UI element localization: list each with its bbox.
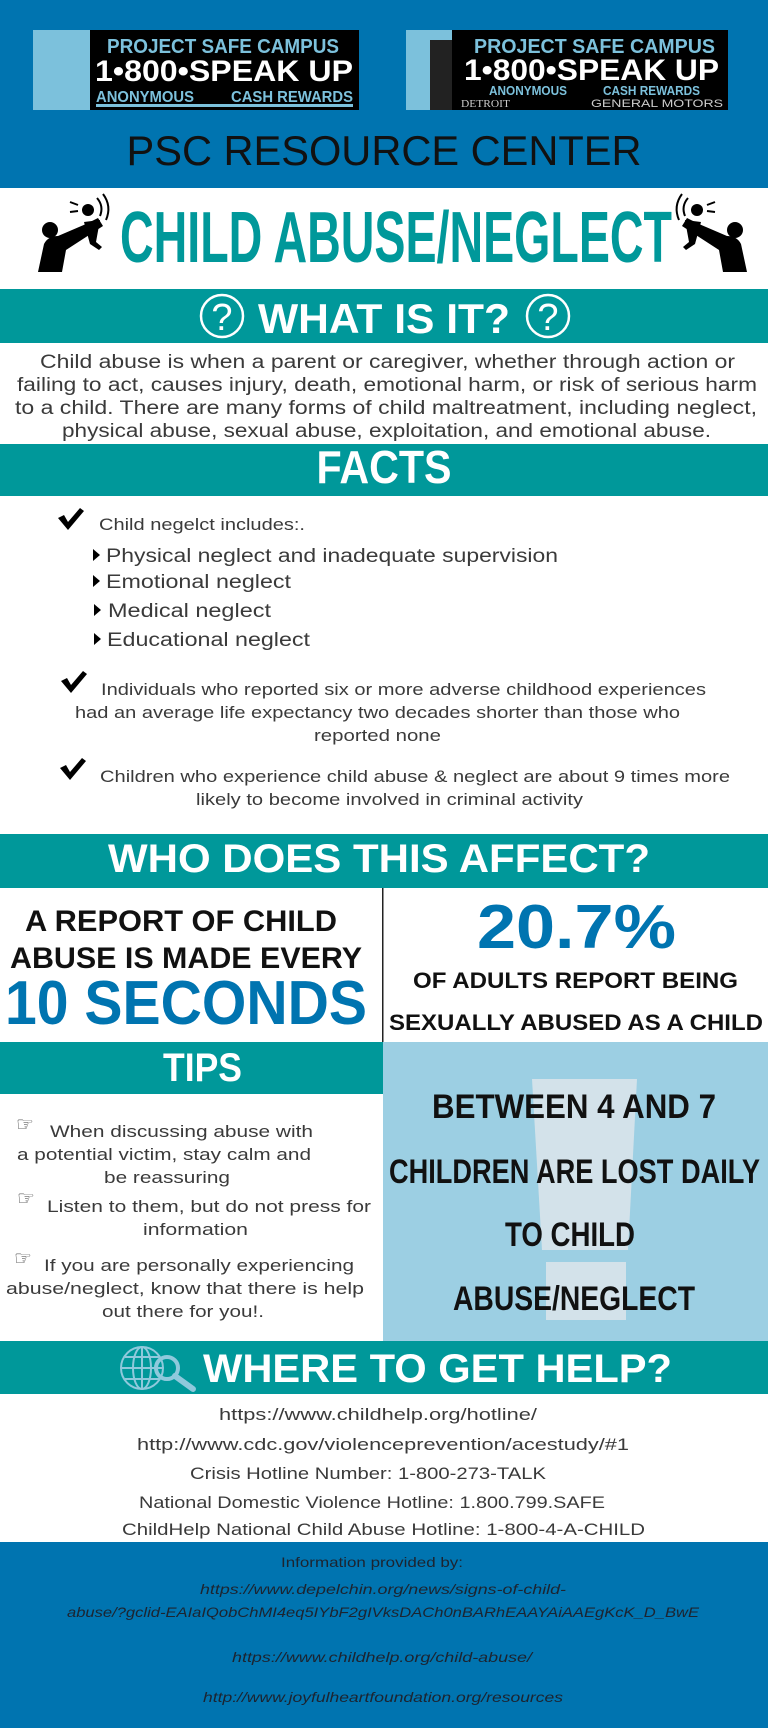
icon: adult hitting child right xyxy=(677,194,747,272)
footer: sources xyxy=(0,1542,768,1728)
panel: children lost daily: ABUSE/NEGLECT xyxy=(453,1280,695,1318)
stat: 20.7% xyxy=(389,893,763,1035)
logo right xyxy=(406,30,728,110)
help resources list: http://www.cdc.gov/violenceprevention/acestudy/#1 xyxy=(137,1435,629,1454)
text block: definition: physical abuse, sexual abuse, exploitation, and emotional abuse. xyxy=(62,421,711,442)
fact 2: had an average life expectancy two decades shorter than those who xyxy=(75,703,680,722)
logo right: CASH REWARDS xyxy=(603,83,700,98)
logo right: PROJECT SAFE CAMPUS xyxy=(474,36,715,58)
panel: children lost daily xyxy=(383,1042,768,1341)
help resources list: ChildHelp National Child Abuse Hotline: 1-800-4-A-CHILD xyxy=(122,1520,645,1539)
heading: facts xyxy=(0,441,768,496)
footer: sources: https://www.childhelp.org/child-abuse/ xyxy=(232,1649,535,1665)
help resources list: Crisis Hotline Number: 1-800-273-TALK xyxy=(190,1464,547,1483)
fact 3: Children who experience child abuse & neglect are about 9 times more xyxy=(100,767,730,786)
logo left: 1•800•SPEAK UP xyxy=(95,55,353,88)
heading: what is it xyxy=(0,289,768,343)
fact 2: reported none xyxy=(314,726,441,745)
help resources list xyxy=(122,1405,645,1539)
panel: tips: TIPS xyxy=(163,1046,242,1090)
logo right: GENERAL MOTORS xyxy=(591,98,723,110)
footer: sources: http://www.joyfulheartfoundation.org/resources xyxy=(203,1689,563,1705)
panel: children lost daily: BETWEEN 4 AND 7 xyxy=(432,1088,716,1126)
footer: sources: abuse/?gclid-EAIaIQobChMI4eq5IYbF2gIVksDACh0nBARhEAAYAiAAEgKcK_D_BwE xyxy=(67,1604,700,1620)
fact 2: Individuals who reported six or more adverse childhood experiences xyxy=(101,680,706,699)
header band xyxy=(0,0,768,188)
help resources list: National Domestic Violence Hotline: 1.800.799.SAFE xyxy=(139,1493,605,1512)
text block: definition: to a child. There are many forms of child maltreatment, including neglect, xyxy=(15,398,757,419)
heading: what is it: ? xyxy=(537,297,559,339)
panel: tips: ☞ xyxy=(16,1114,34,1136)
text block: definition: Child abuse is when a parent or caregiver, whether through action or xyxy=(40,352,736,373)
panel: tips: When discussing abuse with xyxy=(50,1122,313,1141)
stat: report every 10 seconds: ABUSE IS MADE EVERY xyxy=(10,942,362,975)
fact 1: Emotional neglect xyxy=(106,572,292,593)
footer: sources: https://www.depelchin.org/news/signs-of-child- xyxy=(200,1581,566,1597)
panel: children lost daily: TO CHILD xyxy=(505,1216,635,1254)
logo right: DETROIT xyxy=(461,98,510,110)
panel: tips xyxy=(0,1042,383,1321)
panel: tips: abuse/neglect, know that there is help xyxy=(6,1279,364,1298)
fact 3: likely to become involved in criminal activity xyxy=(196,790,584,809)
logo right: 1•800•SPEAK UP xyxy=(464,54,719,87)
fact 2 xyxy=(61,671,706,745)
panel: tips: ☞ xyxy=(14,1248,32,1270)
panel: tips: be reassuring xyxy=(104,1168,230,1187)
heading: who does this affect: WHO DOES THIS AFFECT? xyxy=(108,837,650,881)
heading: who does this affect xyxy=(0,834,768,888)
logo right: ANONYMOUS xyxy=(489,83,567,98)
panel: tips: Listen to them, but do not press for xyxy=(47,1197,371,1216)
logo left xyxy=(33,30,359,110)
text block: definition: failing to act, causes injury, death, emotional harm, or risk of serious harm xyxy=(17,375,757,396)
fact 3 xyxy=(60,758,730,809)
panel: tips: If you are personally experiencing xyxy=(44,1256,354,1275)
stat: report every 10 seconds xyxy=(5,905,367,1038)
divider xyxy=(382,888,384,1042)
icon: adult hitting child left xyxy=(38,194,108,272)
fact 1: Child negelct includes:. xyxy=(99,515,305,534)
footer: sources: Information provided by: xyxy=(281,1554,463,1570)
fact 1: Educational neglect xyxy=(107,630,311,651)
fact 1: Physical neglect and inadequate supervision xyxy=(106,546,558,567)
panel: tips: ☞ xyxy=(17,1188,35,1210)
panel: tips: out there for you!. xyxy=(102,1302,264,1321)
fact 1: Medical neglect xyxy=(108,601,272,622)
logo left: PROJECT SAFE CAMPUS xyxy=(107,36,339,58)
panel: tips: information xyxy=(143,1220,248,1239)
stat: 20.7%: 20.7% xyxy=(477,893,676,962)
panel: tips: a potential victim, stay calm and xyxy=(17,1145,311,1164)
header title: PSC RESOURCE CENTER xyxy=(126,127,642,174)
text block: definition xyxy=(15,352,757,442)
heading: facts: FACTS xyxy=(316,441,452,493)
fact 1 xyxy=(58,508,558,651)
heading: where to get help xyxy=(0,1341,768,1394)
stat: report every 10 seconds: 10 SECONDS xyxy=(5,969,367,1038)
heading: what is it: ? xyxy=(211,297,233,339)
facts list xyxy=(58,508,730,809)
heading: where to get help: WHERE TO GET HELP? xyxy=(203,1347,672,1391)
stat: 20.7%: OF ADULTS REPORT BEING xyxy=(413,968,738,993)
logo left: ANONYMOUS xyxy=(96,89,194,106)
icon: exclamation background xyxy=(532,1079,637,1320)
icon: globe with magnifier xyxy=(121,1347,193,1389)
heading: what is it: WHAT IS IT? xyxy=(258,295,510,342)
stat: 20.7%: SEXUALLY ABUSED AS A CHILD xyxy=(389,1010,763,1035)
help resources list: https://www.childhelp.org/hotline/ xyxy=(219,1405,537,1424)
stat: report every 10 seconds: A REPORT OF CHILD xyxy=(25,905,337,938)
logo left: CASH REWARDS xyxy=(231,89,353,106)
